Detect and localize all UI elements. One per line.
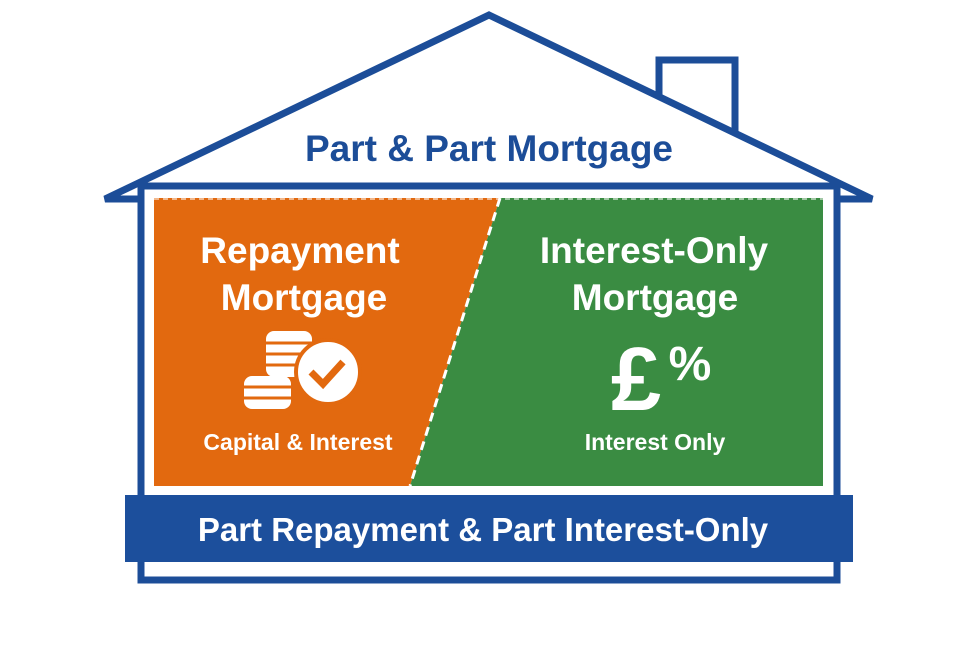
panel: repayment: Mortgage	[221, 277, 387, 318]
roof	[105, 15, 872, 199]
heading: interest-only: Interest-Only	[540, 230, 769, 271]
icon: coins with check	[244, 331, 360, 409]
heading: repayment: Repayment	[200, 230, 400, 271]
panel: repayment	[154, 198, 500, 486]
panel: interest-only: %	[669, 338, 711, 391]
panel: interest-only	[154, 198, 823, 486]
banner: Part Repayment & Part Interest-Only	[198, 511, 769, 548]
icon: pound percent: £	[611, 330, 661, 430]
house body	[141, 186, 837, 580]
banner	[125, 495, 853, 562]
title: Part & Part Mortgage	[305, 128, 673, 169]
panel: interest-only: Mortgage	[572, 277, 738, 318]
chimney	[659, 60, 735, 150]
text: interest only: Interest Only	[585, 429, 725, 455]
text: capital & interest: Capital & Interest	[203, 429, 393, 455]
divider dashes	[410, 198, 500, 486]
